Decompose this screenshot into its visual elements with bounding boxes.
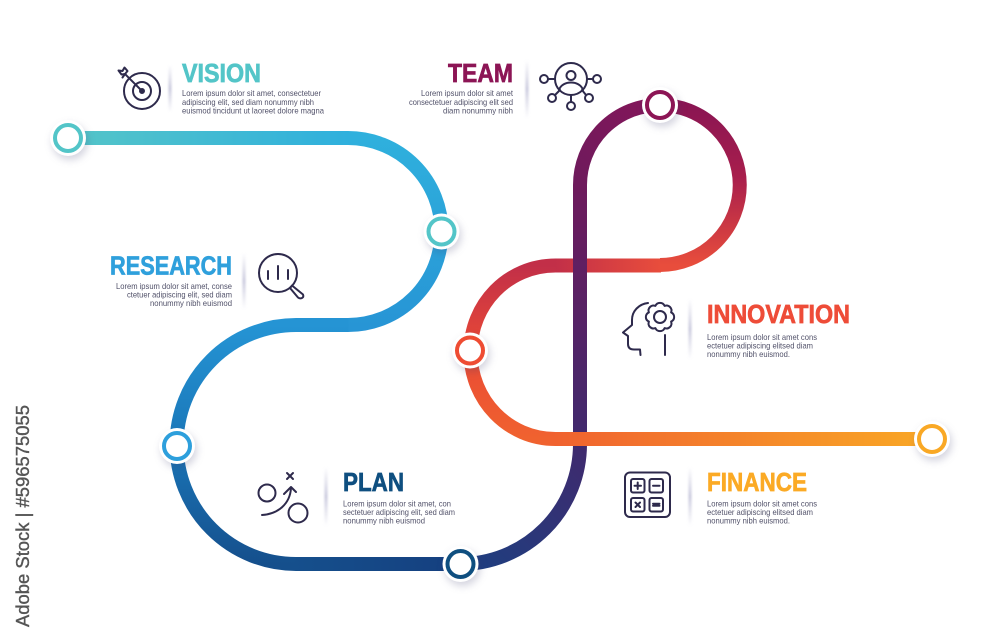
panel: vision <box>118 58 324 116</box>
text: research body <box>116 281 232 308</box>
text: plan body: Lorem ipsum dolor sit amet, con <box>343 498 451 508</box>
text: research body: nonummy nibh euismod <box>150 298 232 308</box>
text: team body: consectetuer adipiscing elit sed <box>409 97 513 107</box>
icon: target with arrow <box>118 68 160 109</box>
panel: finance <box>625 467 817 526</box>
text: innovation body: Lorem ipsum dolor sit amet cons <box>707 332 817 342</box>
heading: finance: FINANCE <box>707 467 807 497</box>
text: plan body <box>343 498 455 526</box>
node: team <box>442 546 478 582</box>
icon: strategy play <box>258 473 308 522</box>
icon: magnifier with bars <box>259 254 303 298</box>
text: team body: diam nonummy nibh <box>443 106 513 116</box>
node: plan <box>159 428 195 464</box>
text: plan body: sectetuer adipiscing elit, sed diam <box>343 507 455 517</box>
node: start teal <box>50 120 86 156</box>
text: innovation body: ectetuer adipiscing elitsed diam <box>707 340 813 350</box>
text: finance body: nonummy nibh euismod. <box>707 516 790 526</box>
heading: research: RESEARCH <box>110 250 232 280</box>
roadmap path <box>68 105 932 564</box>
node: research <box>424 214 460 250</box>
node: finance <box>452 332 488 368</box>
panel: plan <box>258 467 455 526</box>
icon: head with gear <box>623 303 674 355</box>
text: research body: Lorem ipsum dolor sit amet, conse <box>116 281 232 291</box>
panel: team <box>409 58 601 118</box>
text: finance body: ectetuer adipiscing elitsed diam <box>707 507 813 517</box>
node: innovation <box>642 87 678 123</box>
heading: team: TEAM <box>448 58 513 88</box>
text: plan body: nonummy nibh euismod <box>343 516 425 526</box>
text: research body: ctetuer adipiscing elit, sed diam <box>127 290 232 300</box>
text: vision body: euismod tincidunt ut laoreet dolore magna <box>182 106 324 116</box>
text: team body: Lorem ipsum dolor sit amet <box>421 88 514 98</box>
text: vision body: adipiscing elit, sed diam nonummy nibh <box>182 97 314 107</box>
text: innovation body <box>707 332 817 359</box>
heading: innovation: INNOVATION <box>707 299 850 329</box>
stock credit: Adobe Stock | #596575055 <box>13 405 33 627</box>
panel: research <box>110 250 303 309</box>
text: vision body: Lorem ipsum dolor sit amet, consectetuer <box>182 88 321 98</box>
heading: vision: VISION <box>182 58 261 88</box>
icon: calculator <box>625 472 670 517</box>
icon: people network <box>540 63 601 110</box>
text: finance body: Lorem ipsum dolor sit amet cons <box>707 498 817 508</box>
text: vision body <box>182 88 324 116</box>
panel: innovation <box>623 299 850 359</box>
heading: plan: PLAN <box>343 467 404 497</box>
text: innovation body: nonummy nibh euismod. <box>707 349 790 359</box>
text: finance body <box>707 498 817 526</box>
text: team body <box>409 88 514 116</box>
node: end amber <box>914 421 950 457</box>
